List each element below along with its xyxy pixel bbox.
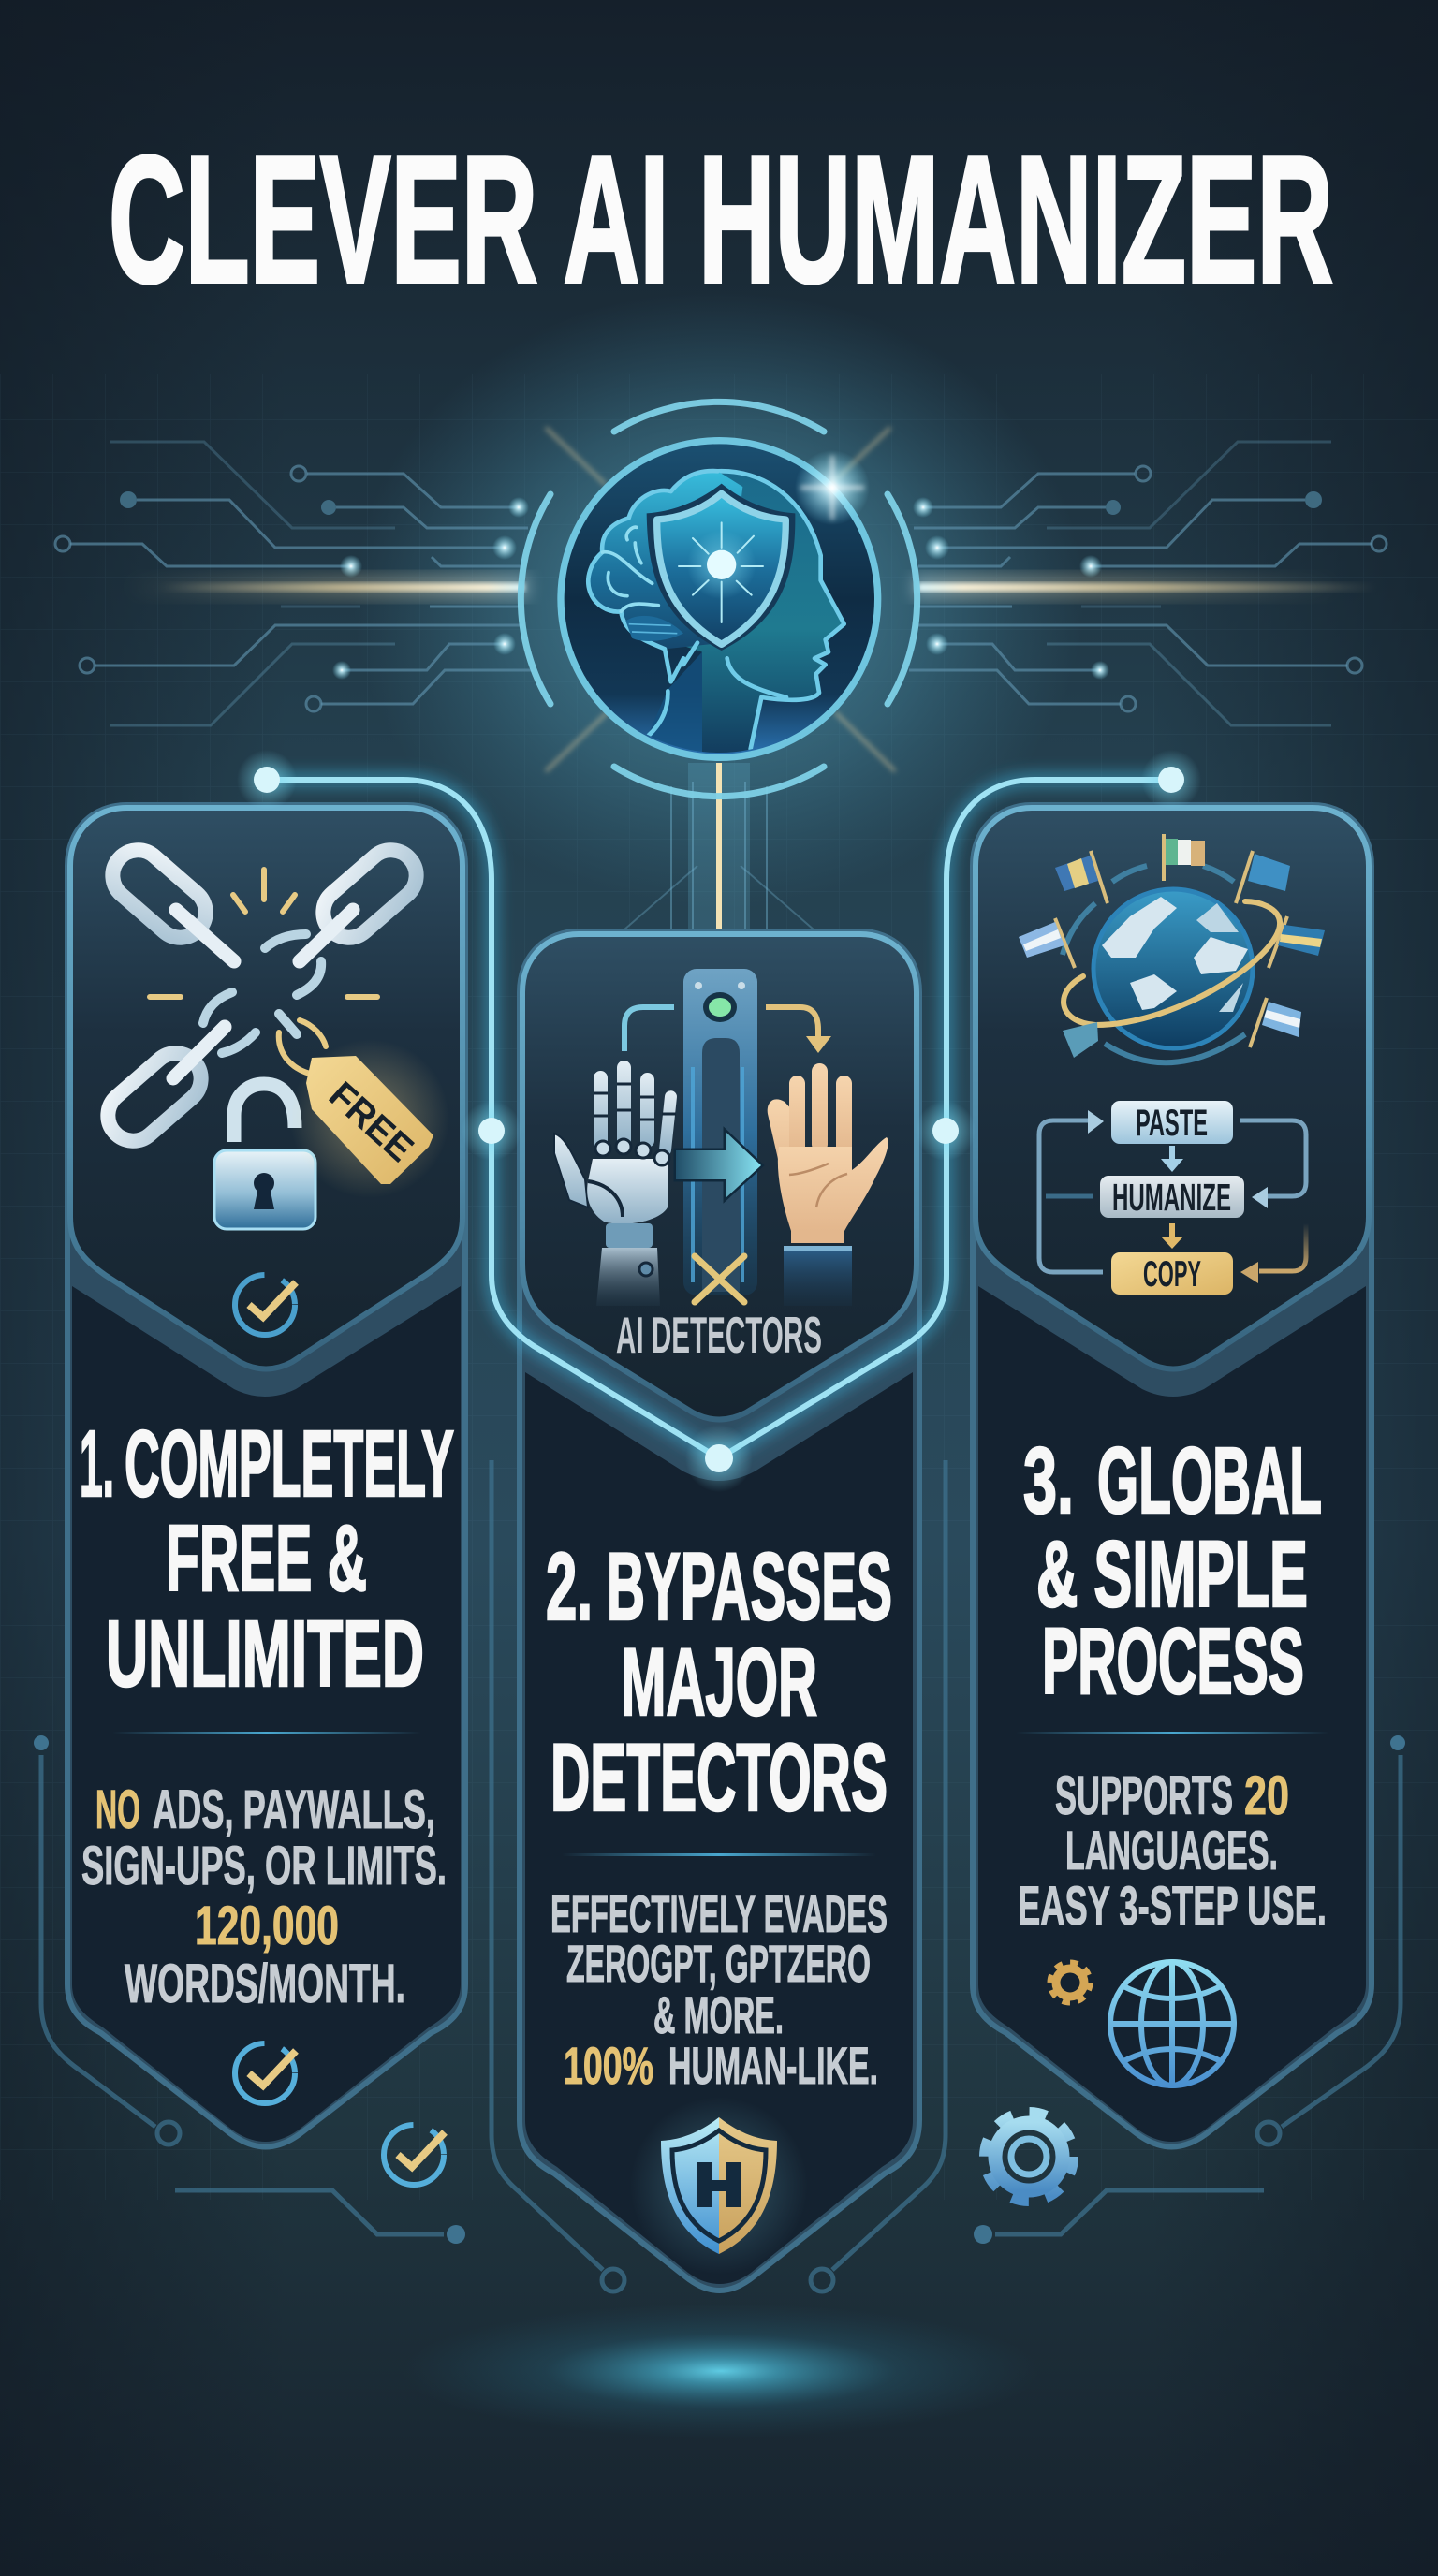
icon: broken chain — [97, 840, 427, 1151]
icon: external check — [384, 2125, 445, 2185]
panel 1 body text: WORDS/MONTH. — [125, 1954, 405, 2014]
panel 3 body text: SUPPORTS — [1055, 1765, 1233, 1826]
panel 1 heading: COMPLETELY — [125, 1412, 454, 1516]
panel 2: bypasses major detectors — [520, 931, 919, 2291]
panel 2 body text: HUMAN-LIKE. — [668, 2036, 878, 2095]
icon: gold cross — [695, 1256, 744, 1302]
emblem flares — [546, 428, 895, 771]
panel 2 body text: 100% — [564, 2036, 653, 2095]
panel 2 body — [520, 931, 919, 2291]
icon: scanner gate — [683, 969, 757, 1295]
flow diagram: paste, humanize, copy: HUMANIZE — [1112, 1176, 1231, 1219]
panel 3 heading: 3. — [1023, 1428, 1074, 1533]
connector arrows — [624, 1007, 831, 1053]
panel 2 body text: EFFECTIVELY EVADES — [550, 1884, 888, 1943]
panel 3 heading — [1023, 1428, 1322, 1714]
panel 1 body — [67, 805, 465, 2147]
faint lower circuit lines — [34, 1460, 1405, 2291]
icon: small gold gear — [1051, 1964, 1089, 2001]
emblem star flare — [795, 450, 870, 525]
panel 1 heading: UNLIMITED — [106, 1602, 424, 1706]
panel 2 body text: & MORE. — [653, 1985, 784, 2044]
arrow through scanner — [676, 1132, 761, 1198]
panel 2 heading: MAJOR — [621, 1629, 817, 1735]
icon: free tag: FREE — [321, 1075, 421, 1170]
flow diagram: paste, humanize, copy: PASTE — [1136, 1103, 1208, 1144]
icon: human hand — [768, 1063, 888, 1306]
panel 1 body text: ADS, PAYWALLS, — [153, 1779, 435, 1840]
circuit traces left — [55, 442, 533, 725]
ai detectors label: AI DETECTORS — [616, 1306, 822, 1364]
panel 1 heading: 1. — [80, 1412, 114, 1516]
panel 3 body text: LANGUAGES. — [1065, 1821, 1278, 1881]
panel 1 body text: NO — [95, 1779, 140, 1840]
icon: wire globe — [1110, 1962, 1234, 2086]
panel 3 body — [973, 805, 1372, 2147]
panel 2 body text — [550, 1884, 888, 2095]
panel 2 heading: BYPASSES — [607, 1533, 892, 1640]
icon: large blue gear — [989, 2116, 1069, 2197]
panel 2 heading: DETECTORS — [550, 1724, 888, 1831]
panel 2 heading: 2. — [546, 1533, 593, 1640]
icon: free tag — [279, 1020, 449, 1198]
divider — [1016, 1732, 1329, 1734]
glowing circuit dots — [332, 497, 1109, 680]
icon: robot hand — [554, 1061, 678, 1306]
flow diagram: paste, humanize, copy — [1039, 1101, 1306, 1295]
connector nodes — [237, 750, 1201, 1492]
panel 1: completely free and unlimited — [67, 805, 465, 2147]
panel 1 body text: 120,000 — [195, 1895, 339, 1956]
circuit traces right — [909, 442, 1387, 725]
panel 1 body text: SIGN-UPS, OR LIMITS. — [81, 1836, 447, 1896]
panel 1 body text — [81, 1779, 447, 2014]
panel 2 heading — [546, 1533, 892, 1831]
panel 3 body text — [1018, 1765, 1327, 1937]
icon: check — [235, 1275, 296, 1335]
gold light streaks — [122, 575, 1376, 599]
connector from emblem to panel 2 — [624, 763, 814, 931]
panel 2 body text: ZEROGPT, GPTZERO — [566, 1934, 871, 1993]
icon: padlock — [214, 1084, 315, 1229]
divider — [562, 1853, 876, 1856]
icon: globe with flags — [1019, 834, 1325, 1062]
icon: check — [235, 2043, 296, 2103]
divider — [112, 1732, 421, 1734]
panel 1 heading: FREE & — [166, 1506, 367, 1611]
panel 3 body text: 20 — [1244, 1765, 1289, 1826]
panel 3: global and simple process — [973, 805, 1372, 2147]
emblem outer arcs — [521, 402, 917, 797]
icon: h shield — [630, 2097, 808, 2275]
emblem disc and artwork — [561, 441, 878, 758]
emblem: head, brain and shield — [521, 402, 917, 797]
panel 1 heading — [80, 1412, 454, 1706]
glowing main connector — [267, 780, 1171, 1458]
flow diagram: paste, humanize, copy: COPY — [1143, 1254, 1201, 1295]
